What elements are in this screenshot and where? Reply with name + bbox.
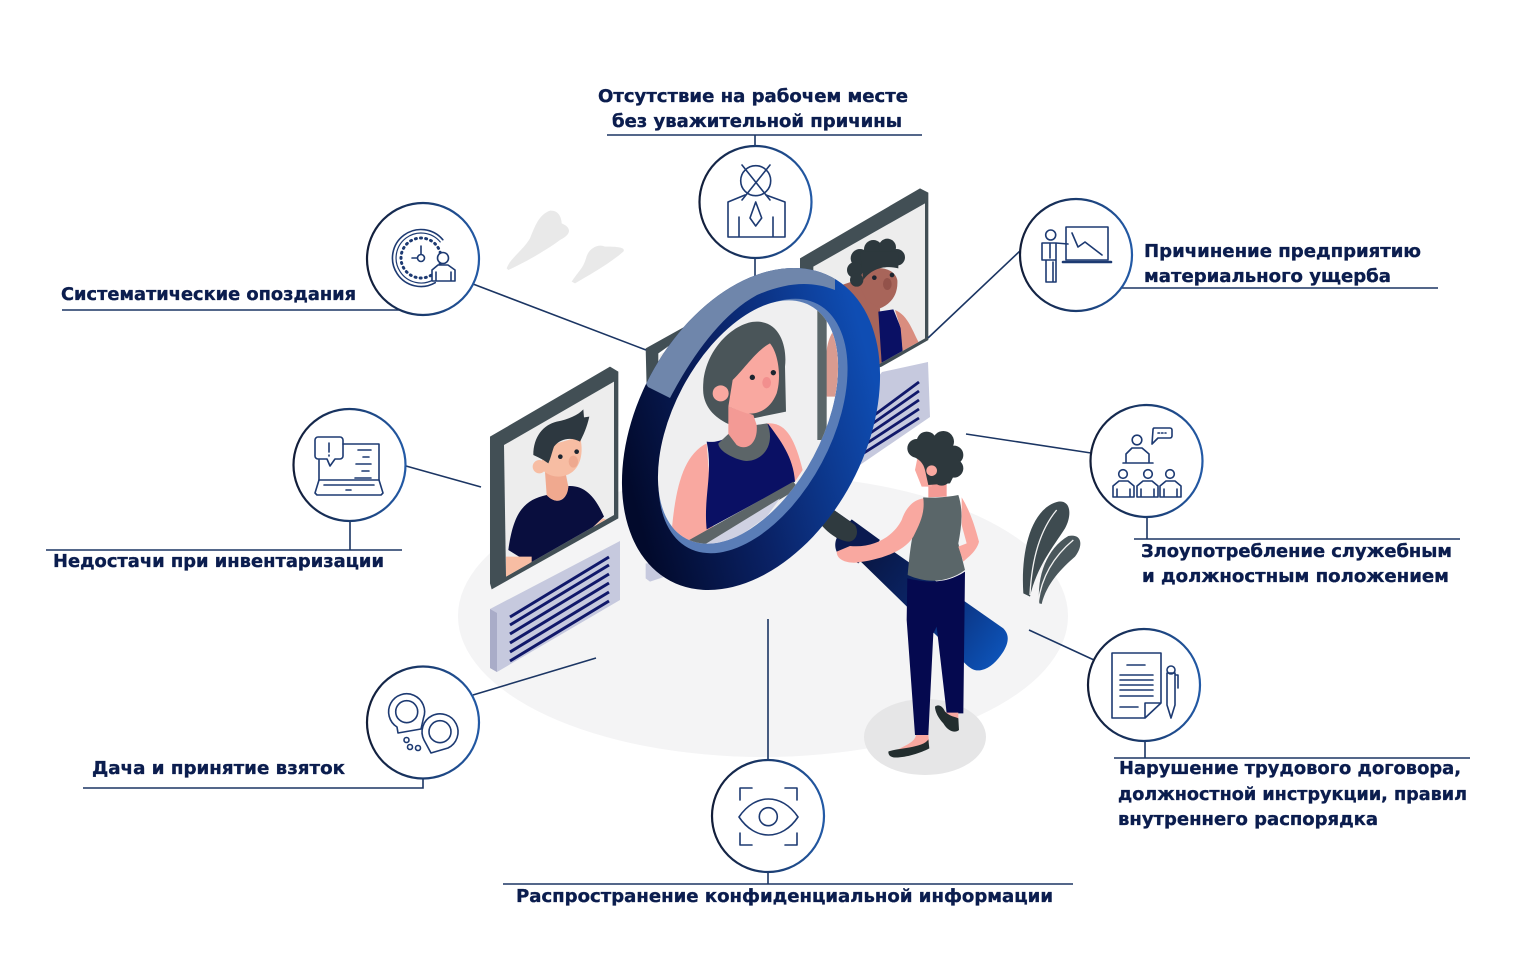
icon circle: contract violation [1088,629,1200,741]
heading: labour contract violation: Нарушение трудового договора, [1119,759,1461,779]
magnifying glass [622,268,880,590]
heading: systematic lateness: Систематические опоздания [61,285,356,305]
heading: labour contract violation: должностной инструкции, правил [1118,785,1467,805]
icon circle: inventory [294,409,406,521]
icon circle: confidential information [712,760,824,872]
top grey band of ring [646,268,835,398]
heading: labour contract violation: внутреннего распорядка [1118,810,1378,830]
heading: abuse of office [1141,542,1452,587]
heading: abuse of office: и должностным положением [1142,567,1449,587]
clouds [507,211,624,283]
heading: material damage: материального ущерба [1144,267,1391,287]
heading: labour contract violation [1118,759,1467,830]
icon circle: damage [1020,199,1132,311]
icon circle: bribes [367,666,479,778]
panel: right caption plate [856,362,930,467]
heading: absence from workplace: Отсутствие на рабочем месте [598,87,908,107]
heading: bribes: Дача и принятие взяток [92,759,345,779]
panel: left portrait [490,367,618,589]
lens contents [658,300,838,544]
heading: inventory shortages: Недостачи при инвентаризации [53,552,384,572]
connector lines [46,135,1470,884]
magnifier handle [820,508,1008,670]
heading: confidential information: Распространение конфиденциальной информации [516,887,1053,907]
heading: material damage: Причинение предприятию [1144,242,1421,262]
shadow under woman [864,699,986,775]
plant [1023,502,1080,604]
heading: material damage [1144,242,1421,287]
heading: absence from workplace: без уважительной причины [612,112,902,132]
icon circle: abuse of office [1090,405,1202,517]
panel: right portrait [800,188,928,368]
heading: absence from workplace [598,87,908,132]
woman holding magnifier [837,431,979,757]
icon circle: absence [700,146,812,258]
floor ellipse [458,475,1068,757]
panel: left caption plate [490,541,620,672]
heading: abuse of office: Злоупотребление служебным [1141,542,1452,562]
panel: middle portrait frame [646,320,697,582]
icon circle: lateness [367,203,479,315]
